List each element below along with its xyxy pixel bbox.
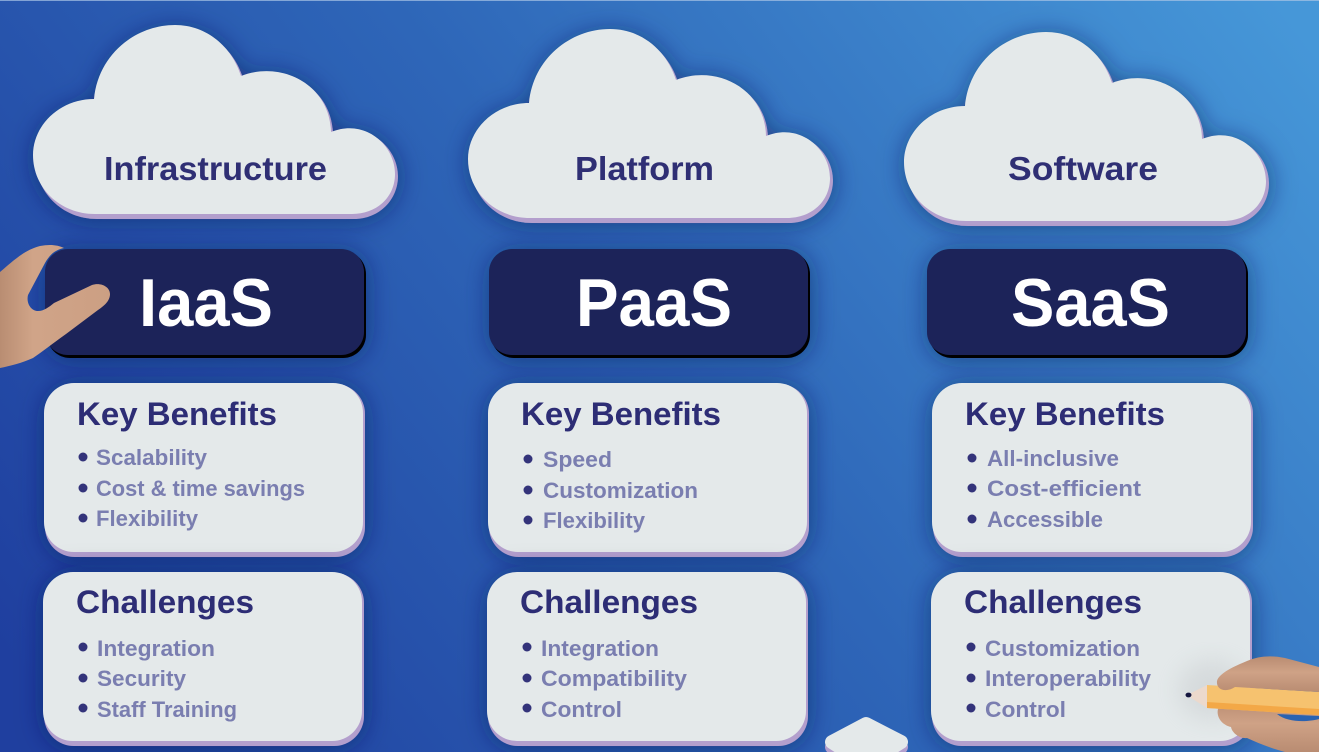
- banner: SaaS: [927, 249, 1248, 358]
- gap between fingers: [1277, 714, 1319, 721]
- panel: SaaS challenges: Control: [985, 697, 1066, 722]
- panel: IaaS key benefits: Key Benefits: [77, 396, 277, 432]
- panel: PaaS key benefits: Key Benefits: [521, 396, 721, 432]
- panel: IaaS challenges: [43, 572, 364, 746]
- panel: SaaS key benefits: Accessible: [987, 507, 1103, 532]
- banner: SaaS: SaaS: [1011, 265, 1170, 341]
- panel: SaaS key benefits: [932, 383, 1253, 557]
- panel: SaaS challenges: [931, 572, 1252, 746]
- banner: IaaS: IaaS: [139, 265, 273, 341]
- panel: PaaS key benefits: [488, 383, 809, 557]
- panel: PaaS challenges: Challenges: [520, 584, 698, 620]
- banner: IaaS: [45, 249, 366, 358]
- panel: SaaS key benefits: Key Benefits: [965, 396, 1165, 432]
- panel: IaaS challenges: Staff Training: [97, 697, 237, 722]
- banner: PaaS: [489, 249, 810, 358]
- lower hand: [1218, 700, 1319, 752]
- panel: PaaS challenges: Compatibility: [541, 666, 688, 691]
- panel: software cloud: [904, 32, 1269, 226]
- panel: IaaS challenges: Integration: [97, 636, 215, 661]
- panel: PaaS challenges: Integration: [541, 636, 659, 661]
- upper hand: [1217, 656, 1319, 692]
- banner: PaaS: PaaS: [576, 265, 732, 341]
- panel: SaaS key benefits: All-inclusive: [987, 446, 1119, 471]
- panel: PaaS key benefits: Flexibility: [543, 508, 646, 533]
- panel: PaaS challenges: [487, 572, 808, 746]
- panel: SaaS challenges: Customization: [985, 636, 1140, 661]
- heading: Platform: Platform: [575, 150, 714, 187]
- icon: left hand holding banner: [0, 245, 110, 368]
- icon: cube at bottom: [832, 724, 901, 752]
- panel: IaaS challenges: Security: [97, 666, 187, 691]
- panel: SaaS key benefits: Cost-efficient: [987, 476, 1142, 501]
- panel: SaaS challenges: Interoperability: [985, 666, 1152, 691]
- heading: Infrastructure: Infrastructure: [104, 150, 327, 187]
- icon: right hand with pencil: [1178, 656, 1319, 752]
- panel: infrastructure cloud: [33, 25, 398, 219]
- panel: IaaS challenges: Challenges: [76, 584, 254, 620]
- pencil: [1186, 685, 1319, 715]
- panel: platform cloud: [468, 29, 833, 223]
- panel: PaaS challenges: Control: [541, 697, 622, 722]
- panel: IaaS key benefits: Flexibility: [96, 506, 199, 531]
- panel: IaaS key benefits: [44, 383, 365, 557]
- panel: IaaS key benefits: Cost & time savings: [96, 476, 305, 501]
- panel: SaaS challenges: Challenges: [964, 584, 1142, 620]
- panel: PaaS key benefits: Speed: [543, 447, 612, 472]
- panel: PaaS key benefits: Customization: [543, 478, 698, 503]
- panel: IaaS key benefits: Scalability: [96, 445, 208, 470]
- heading: Software: Software: [1008, 150, 1158, 187]
